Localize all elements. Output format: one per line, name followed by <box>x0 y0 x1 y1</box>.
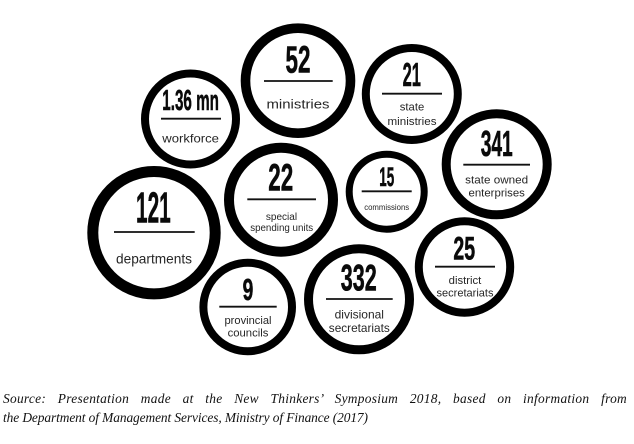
bubble: 121 departments <box>93 172 215 294</box>
bubble: 332 divisional secretariats: divisional <box>335 307 384 321</box>
bubble: 22 special spending units: spending units <box>250 223 313 234</box>
bubble: 9 provincial councils: councils <box>228 328 269 340</box>
bubble: 341 state owned enterprises: 341 <box>481 123 513 164</box>
bubble: 341 state owned enterprises: enterprises <box>469 188 525 200</box>
bubble: 21 state ministries: ministries <box>388 116 437 128</box>
bubble: 341 state owned enterprises <box>446 114 547 215</box>
bubble: 52 ministries: ministries <box>266 97 330 112</box>
bubble: 21 state ministries <box>366 48 458 140</box>
bubble: 21 state ministries: state <box>400 102 424 114</box>
bubble: 332 divisional secretariats: secretariats <box>329 321 390 335</box>
source note: the Department of Management Services, Ministry of Finance (2017) <box>3 410 368 425</box>
bubble: 52 ministries: 52 <box>286 39 310 81</box>
bubble: 25 district secretariats: 25 <box>453 230 475 266</box>
bubble: 21 state ministries: 21 <box>403 56 421 93</box>
bubble: 15 commissions <box>349 154 424 229</box>
bubble: 15 commissions: commissions <box>364 203 409 212</box>
bubble: 1.36 mn workforce <box>145 74 236 164</box>
bubble: 15 commissions: 15 <box>379 162 394 192</box>
bubble: 332 divisional secretariats <box>308 249 410 350</box>
bubble: 121 departments: 121 <box>136 183 171 232</box>
bubble: 332 divisional secretariats: 332 <box>341 258 377 299</box>
bubble: 52 ministries <box>246 28 350 133</box>
bubble: 121 departments: departments <box>116 251 192 266</box>
bubble: 1.36 mn workforce: 1.36 mn <box>162 85 219 117</box>
source note: Source: Presentation made at the New Thinkers’ Symposium 2018, based on information from <box>3 391 627 406</box>
bubble: 22 special spending units: special <box>266 212 297 223</box>
bubble: 1.36 mn workforce: workforce <box>161 132 219 146</box>
bubble: 341 state owned enterprises: state owned <box>465 175 528 187</box>
bubble: 25 district secretariats <box>419 221 510 313</box>
bubble: 22 special spending units <box>229 148 333 252</box>
bubble: 9 provincial councils <box>203 263 292 351</box>
source note <box>3 391 627 425</box>
bubble: 9 provincial councils: 9 <box>243 272 253 307</box>
bubble: 9 provincial councils: provincial <box>224 315 272 327</box>
bubble: 22 special spending units: 22 <box>268 158 293 200</box>
bubble: 25 district secretariats: secretariats <box>436 288 494 300</box>
bubble: 25 district secretariats: district <box>449 275 482 287</box>
